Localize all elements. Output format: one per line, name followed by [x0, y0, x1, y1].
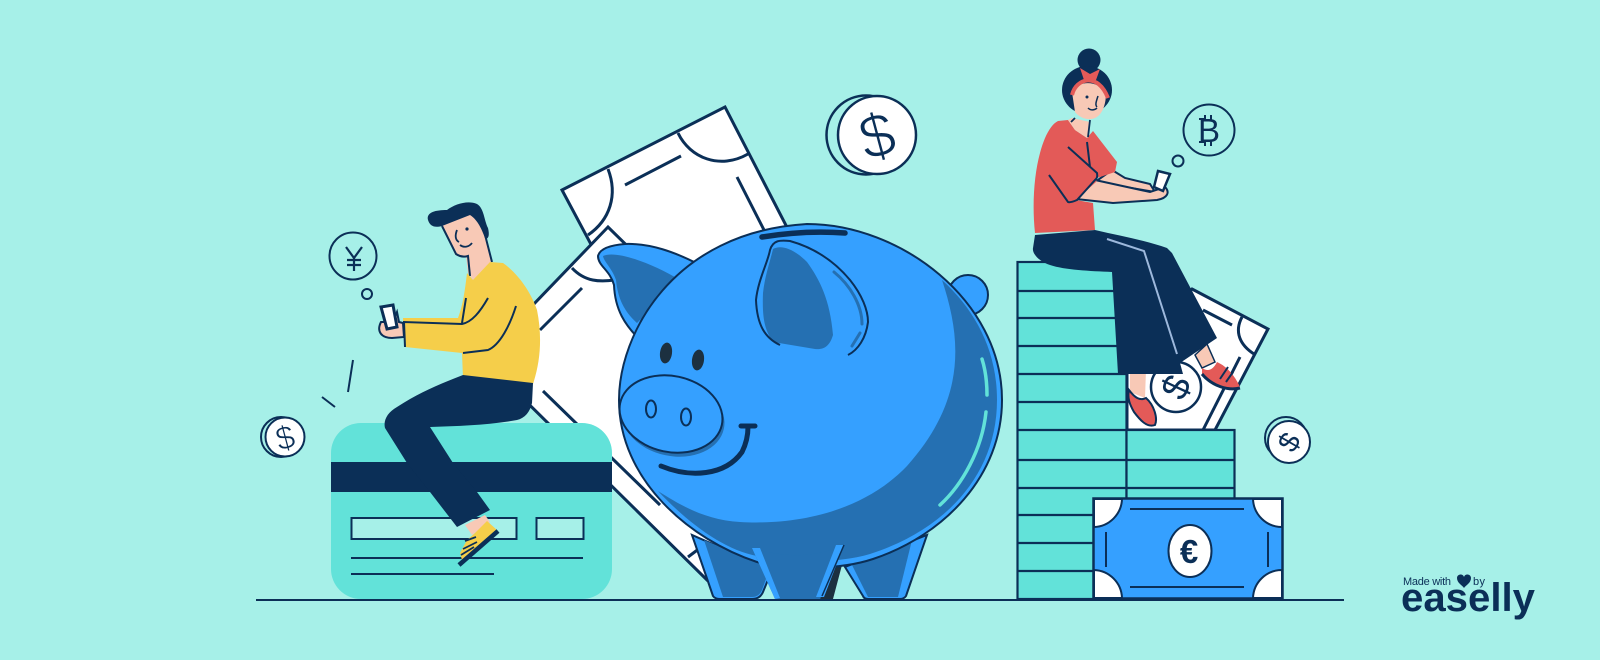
man on card	[379, 202, 540, 565]
banknote: upper back note	[562, 107, 810, 355]
pig smile	[661, 426, 755, 473]
pig centre leg	[752, 545, 844, 599]
pig tail	[948, 275, 988, 315]
motion lines	[322, 360, 353, 407]
banknote: lower back note	[482, 227, 833, 580]
pig body	[619, 224, 1002, 568]
pig body shadow	[658, 280, 997, 561]
euro banknote	[1094, 498, 1282, 598]
woman trousers	[1033, 230, 1217, 374]
pig coin slot	[762, 232, 845, 237]
large dollar coin	[826, 96, 916, 174]
easelly logo: Made with	[1403, 576, 1451, 588]
pig back ear	[598, 244, 700, 340]
small dollar coin right: $	[1272, 428, 1308, 457]
man hand and phone	[379, 305, 404, 338]
woman legs and shoes	[1128, 344, 1240, 426]
pig eyes	[659, 342, 705, 371]
woman head	[1062, 48, 1112, 138]
man sweater	[403, 262, 540, 384]
small dollar coin left: $	[271, 417, 299, 458]
euro banknote: €	[1180, 533, 1198, 570]
pig snout	[612, 366, 732, 466]
pig dark back leg	[820, 565, 842, 599]
credit card	[331, 423, 612, 599]
pig highlights	[940, 359, 987, 505]
man shoe	[459, 515, 498, 565]
small dollar coin left	[261, 417, 304, 458]
stack of money	[1017, 262, 1234, 599]
piggy bank	[598, 224, 1002, 599]
banknote: right back note with dollar coin: $	[1153, 369, 1200, 406]
woman arms	[1076, 170, 1170, 203]
pig left leg	[692, 535, 772, 599]
man head	[428, 202, 492, 280]
pig front ear	[756, 241, 868, 355]
pig right leg	[845, 535, 927, 599]
large dollar coin: $	[852, 99, 903, 174]
ground line	[256, 599, 1344, 601]
woman on money stack	[1033, 48, 1240, 426]
yen thought bubble	[330, 232, 376, 299]
man trousers	[385, 375, 533, 527]
small dollar coin right	[1265, 417, 1310, 463]
bitcoin thought bubble	[1172, 104, 1234, 166]
woman shirt	[1034, 120, 1117, 233]
banknote: right back note with dollar coin	[1127, 289, 1268, 430]
easelly logo: by	[1473, 576, 1486, 588]
easelly logo: easelly	[1401, 576, 1536, 620]
bitcoin thought bubble: B	[1198, 112, 1220, 149]
